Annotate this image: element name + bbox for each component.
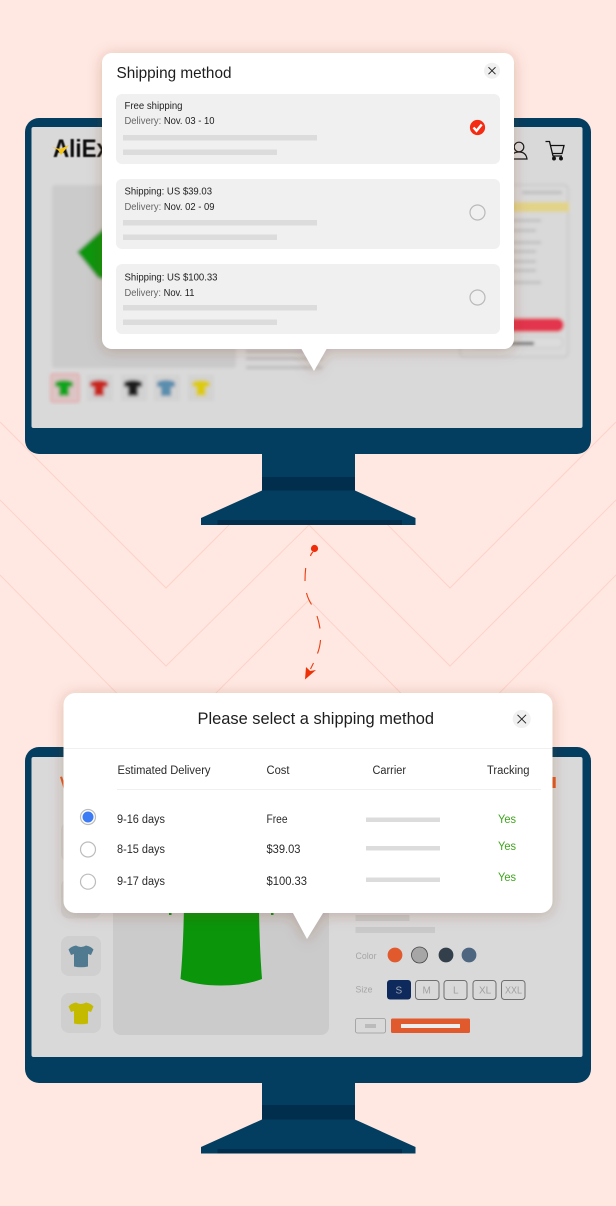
row: 9-16 days, free: 9-16 days	[117, 814, 165, 826]
blurred product thumbnails	[51, 374, 214, 402]
row: 9-17 days, $100.33: 9-17 days	[117, 876, 165, 888]
blurred product image	[52, 185, 236, 368]
size options: M	[422, 986, 431, 996]
popup: shipping method	[102, 53, 514, 371]
row: 9-17 days, $100.33: $100.33	[266, 876, 307, 888]
monitor stand: bottom	[201, 1080, 416, 1154]
table header: Tracking	[487, 765, 530, 777]
option: US $100.33: Shipping: US $100.33	[124, 272, 218, 284]
size options: XL	[479, 986, 492, 996]
row: 8-15 days, $39.03: $39.03	[266, 844, 300, 856]
option: free shipping: Free shipping	[124, 101, 182, 112]
monitor screen: top	[32, 127, 582, 428]
product image panel	[113, 800, 329, 1035]
product thumbnails	[61, 822, 101, 1033]
row: 9-17 days, $100.33	[80, 872, 516, 889]
row: 8-15 days, $39.03: Yes	[498, 841, 516, 853]
color options	[356, 947, 476, 963]
row: 9-16 days, free: Yes	[498, 814, 516, 826]
size options: Size	[356, 984, 372, 996]
row: 8-15 days, $39.03	[80, 841, 516, 857]
monitor: top	[25, 118, 591, 525]
monitor: bottom	[25, 747, 591, 1154]
monitor screen: bottom	[32, 757, 582, 1057]
product detail lines	[356, 915, 435, 933]
close button	[513, 710, 531, 728]
popup card with pointer	[102, 53, 514, 371]
popup: please select a shipping method	[64, 693, 552, 939]
size options: XXL	[505, 986, 522, 996]
row: 9-16 days, free: Free	[266, 814, 288, 826]
option: US $39.03: Delivery: Nov. 02 - 09	[124, 202, 215, 213]
blurred order panel	[460, 185, 569, 357]
monitor frame: top	[25, 118, 591, 454]
arrow: dashed curve between monitors	[305, 545, 320, 680]
size options: L	[453, 986, 459, 996]
table header	[118, 765, 530, 777]
option: US $100.33	[116, 264, 500, 334]
icon: user account	[510, 142, 527, 159]
orange header fragments	[60, 776, 556, 790]
option: US $39.03: Shipping: US $39.03	[124, 186, 212, 198]
row: 8-15 days, $39.03: 8-15 days	[117, 844, 165, 856]
row: 9-17 days, $100.33: Yes	[498, 872, 516, 884]
close button	[484, 63, 500, 79]
size options: S	[396, 986, 402, 996]
option: free shipping: Delivery: Nov. 03 - 10	[124, 116, 215, 127]
icon: shopping cart	[546, 142, 564, 160]
icon: yellow t-shirt	[68, 1002, 94, 1024]
add to cart button	[391, 1018, 470, 1033]
table header: Carrier	[372, 765, 406, 777]
logo: AliExpress: AliEx	[53, 135, 109, 163]
color options: Color	[356, 951, 376, 962]
monitor stand: top	[201, 450, 416, 525]
quantity button	[356, 1018, 386, 1033]
table header: Cost	[266, 765, 290, 777]
size options	[356, 980, 525, 1000]
option: US $100.33: Delivery: Nov. 11	[124, 288, 195, 299]
popup heading: Please select a shipping method	[198, 709, 434, 728]
popup heading: Shipping method	[116, 65, 232, 82]
icon: blue t-shirt	[68, 946, 94, 967]
green t-shirt	[169, 850, 274, 986]
monitor frame: bottom	[25, 747, 591, 1083]
popup card with pointer	[64, 693, 552, 939]
option: US $39.03	[116, 179, 500, 249]
table header: Estimated Delivery	[118, 765, 211, 777]
option: free shipping	[116, 94, 500, 164]
blurred description lines	[246, 350, 322, 369]
row: 9-16 days, free	[80, 810, 516, 826]
